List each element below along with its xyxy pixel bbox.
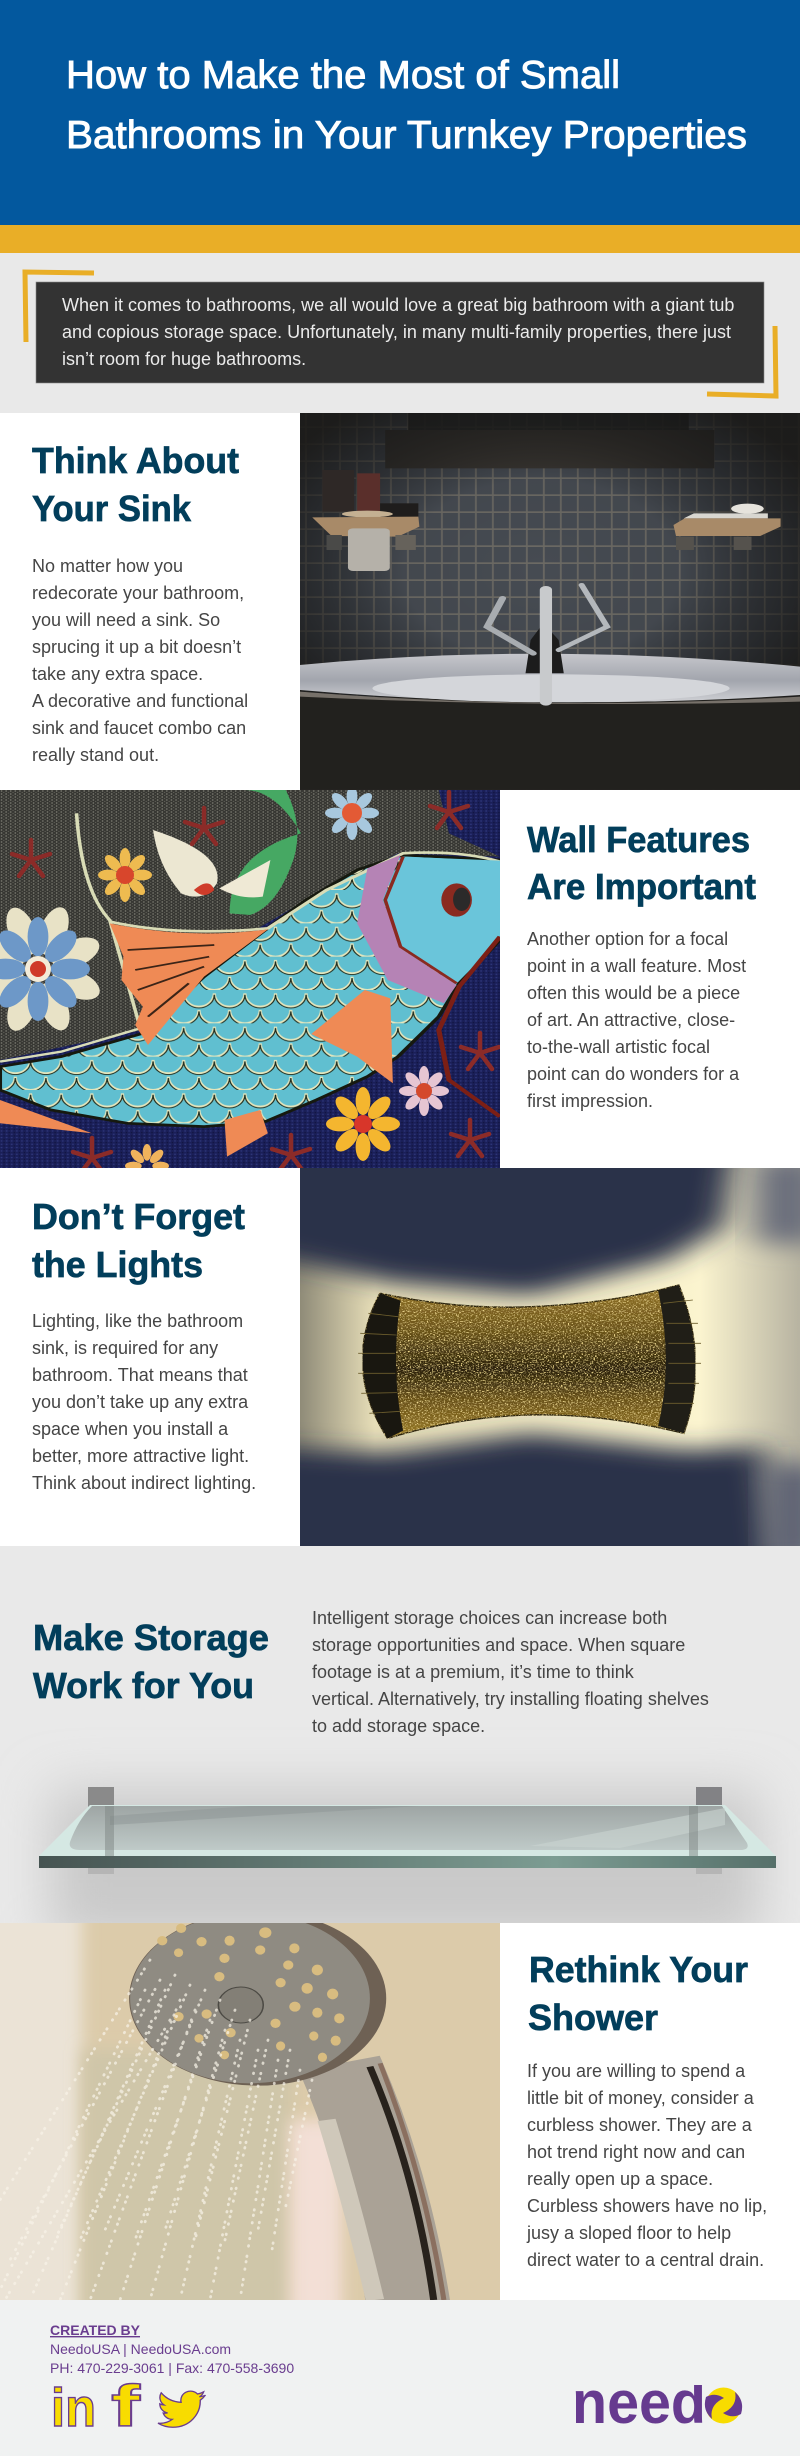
body text: really open up a space.: [527, 2169, 713, 2189]
body text: of art. An attractive, close-: [527, 1010, 735, 1030]
faucet: [487, 585, 607, 702]
heading: Your Sink: [32, 488, 192, 529]
heading: [527, 819, 756, 907]
header banner: [0, 0, 800, 225]
title: [66, 54, 747, 157]
starfish: [12, 792, 499, 1174]
panel: don't forget the lights: [32, 1168, 800, 1546]
shelf shadow: [50, 1790, 760, 1940]
heading: the Lights: [32, 1244, 203, 1285]
panel: think about your sink: [0, 410, 800, 790]
body text: jusy a sloped floor to help: [526, 2223, 731, 2243]
icon: facebook: f: [111, 2374, 141, 2439]
heading: [33, 1617, 269, 1706]
body text: you don’t take up any extra: [32, 1392, 249, 1412]
heading: Shower: [528, 1997, 658, 2038]
leaf and bud: [230, 790, 301, 915]
shower arm: [327, 2063, 444, 2303]
flower: large blue: [0, 907, 100, 1031]
flower: pink: [399, 1066, 449, 1116]
photo: sink and faucet: [300, 410, 800, 790]
title: How to Make the Most of Small: [66, 54, 620, 97]
glass shelf: [39, 1787, 776, 1874]
heading: Work for You: [33, 1665, 254, 1706]
body text: Curbless showers have no lip,: [527, 2196, 767, 2216]
body text: direct water to a central drain.: [527, 2250, 764, 2270]
lower fin: [224, 1110, 268, 1157]
flower: white: [325, 786, 379, 840]
photo: shower head: [0, 1923, 500, 2300]
lamp: [358, 1285, 701, 1438]
heading: Make Storage: [33, 1617, 269, 1658]
fish body: [0, 855, 500, 1127]
body text: bathroom. That means that: [32, 1365, 248, 1385]
gold band: [0, 225, 800, 253]
water spray: [0, 1960, 312, 2300]
panel: make storage work for you: [0, 1546, 800, 1940]
heading: [528, 1949, 748, 2038]
credits: CREATED BY: [50, 2322, 141, 2338]
body text: take any extra space.: [32, 664, 203, 684]
body text: redecorate your bathroom,: [32, 583, 244, 603]
title: Bathrooms in Your Turnkey Properties: [66, 114, 747, 157]
body text: hot trend right now and can: [527, 2142, 745, 2162]
body text: footage is at a premium, it’s time to think: [312, 1662, 635, 1682]
body text: to add storage space.: [312, 1716, 485, 1736]
body text: Another option for a focal: [527, 929, 728, 949]
heading: [32, 440, 239, 529]
body text: sprucing it up a bit doesn’t: [32, 637, 241, 657]
head: [385, 857, 500, 983]
body text: first impression.: [527, 1091, 653, 1111]
orange tail fin: [110, 923, 268, 1045]
credits: NeedoUSA | NeedoUSA.com: [50, 2341, 231, 2357]
body text: little bit of money, consider a: [527, 2088, 755, 2108]
gill: [357, 855, 457, 1003]
body text: No matter how you: [32, 556, 183, 576]
heading: Don’t Forget: [32, 1196, 245, 1237]
photo: ceramic fish art: [0, 786, 500, 1188]
body text: point in a wall feature. Most: [527, 956, 746, 976]
photo: mosaic wall light: [300, 1168, 800, 1546]
body text: really stand out.: [32, 745, 159, 765]
body text: A decorative and functional: [32, 691, 248, 711]
body text: Think about indirect lighting.: [32, 1473, 256, 1493]
body text: If you are willing to spend a: [527, 2061, 746, 2081]
credits: [50, 2322, 294, 2376]
body text: vertical. Alternatively, try installing floating shelves: [312, 1689, 709, 1709]
panel: footer: [0, 2300, 800, 2456]
flower: gold: [326, 1087, 400, 1161]
heading: [32, 1196, 245, 1285]
left shelf: [312, 470, 419, 571]
intro text: and copious storage space. Unfortunately, in many multi-family properties, there just: [62, 322, 731, 342]
panel: rethink your shower: [0, 1923, 766, 2300]
body text: curbless shower. They are a: [527, 2115, 753, 2135]
heading: Wall Features: [527, 819, 750, 860]
logo: needo: [576, 2385, 742, 2424]
heading: Are Important: [527, 866, 756, 907]
right shelf: [673, 504, 781, 550]
flower: yellow: [98, 848, 152, 902]
credits: PH: 470-229-3061 | Fax: 470-558-3690: [50, 2360, 294, 2376]
body text: space when you install a: [32, 1419, 229, 1439]
flower: bottom: [125, 1144, 169, 1168]
pectoral fin: [311, 990, 393, 1083]
panel: wall features: [0, 790, 756, 1168]
body text: often this would be a piece: [527, 983, 740, 1003]
heading: Think About: [32, 440, 239, 481]
body text: point can do wonders for a: [527, 1064, 740, 1084]
body text: to-the-wall artistic focal: [527, 1037, 710, 1057]
body text: sink and faucet combo can: [32, 718, 246, 738]
bracket: bottom right: [707, 326, 776, 396]
heading: Rethink Your: [529, 1949, 748, 1990]
shower head: [129, 1911, 386, 2086]
body text: better, more attractive light.: [32, 1446, 249, 1466]
bracket: top left: [25, 272, 94, 342]
basin: [300, 654, 800, 790]
icon: twitter: [158, 2391, 205, 2427]
body text: you will need a sink. So: [32, 610, 220, 630]
icon: linkedin: in: [51, 2378, 96, 2438]
panel: intro: [0, 253, 800, 413]
body text: sink, is required for any: [32, 1338, 218, 1358]
logo: needo: need: [572, 2369, 706, 2436]
body text: storage opportunities and space. When square: [312, 1635, 685, 1655]
body text: Intelligent storage choices can increase both: [312, 1608, 667, 1628]
body text: Lighting, like the bathroom: [32, 1311, 243, 1331]
intro text: When it comes to bathrooms, we all would love a great big bathroom with a giant tub: [62, 295, 734, 315]
intro box: [36, 282, 764, 383]
intro text: isn’t room for huge bathrooms.: [62, 349, 306, 369]
